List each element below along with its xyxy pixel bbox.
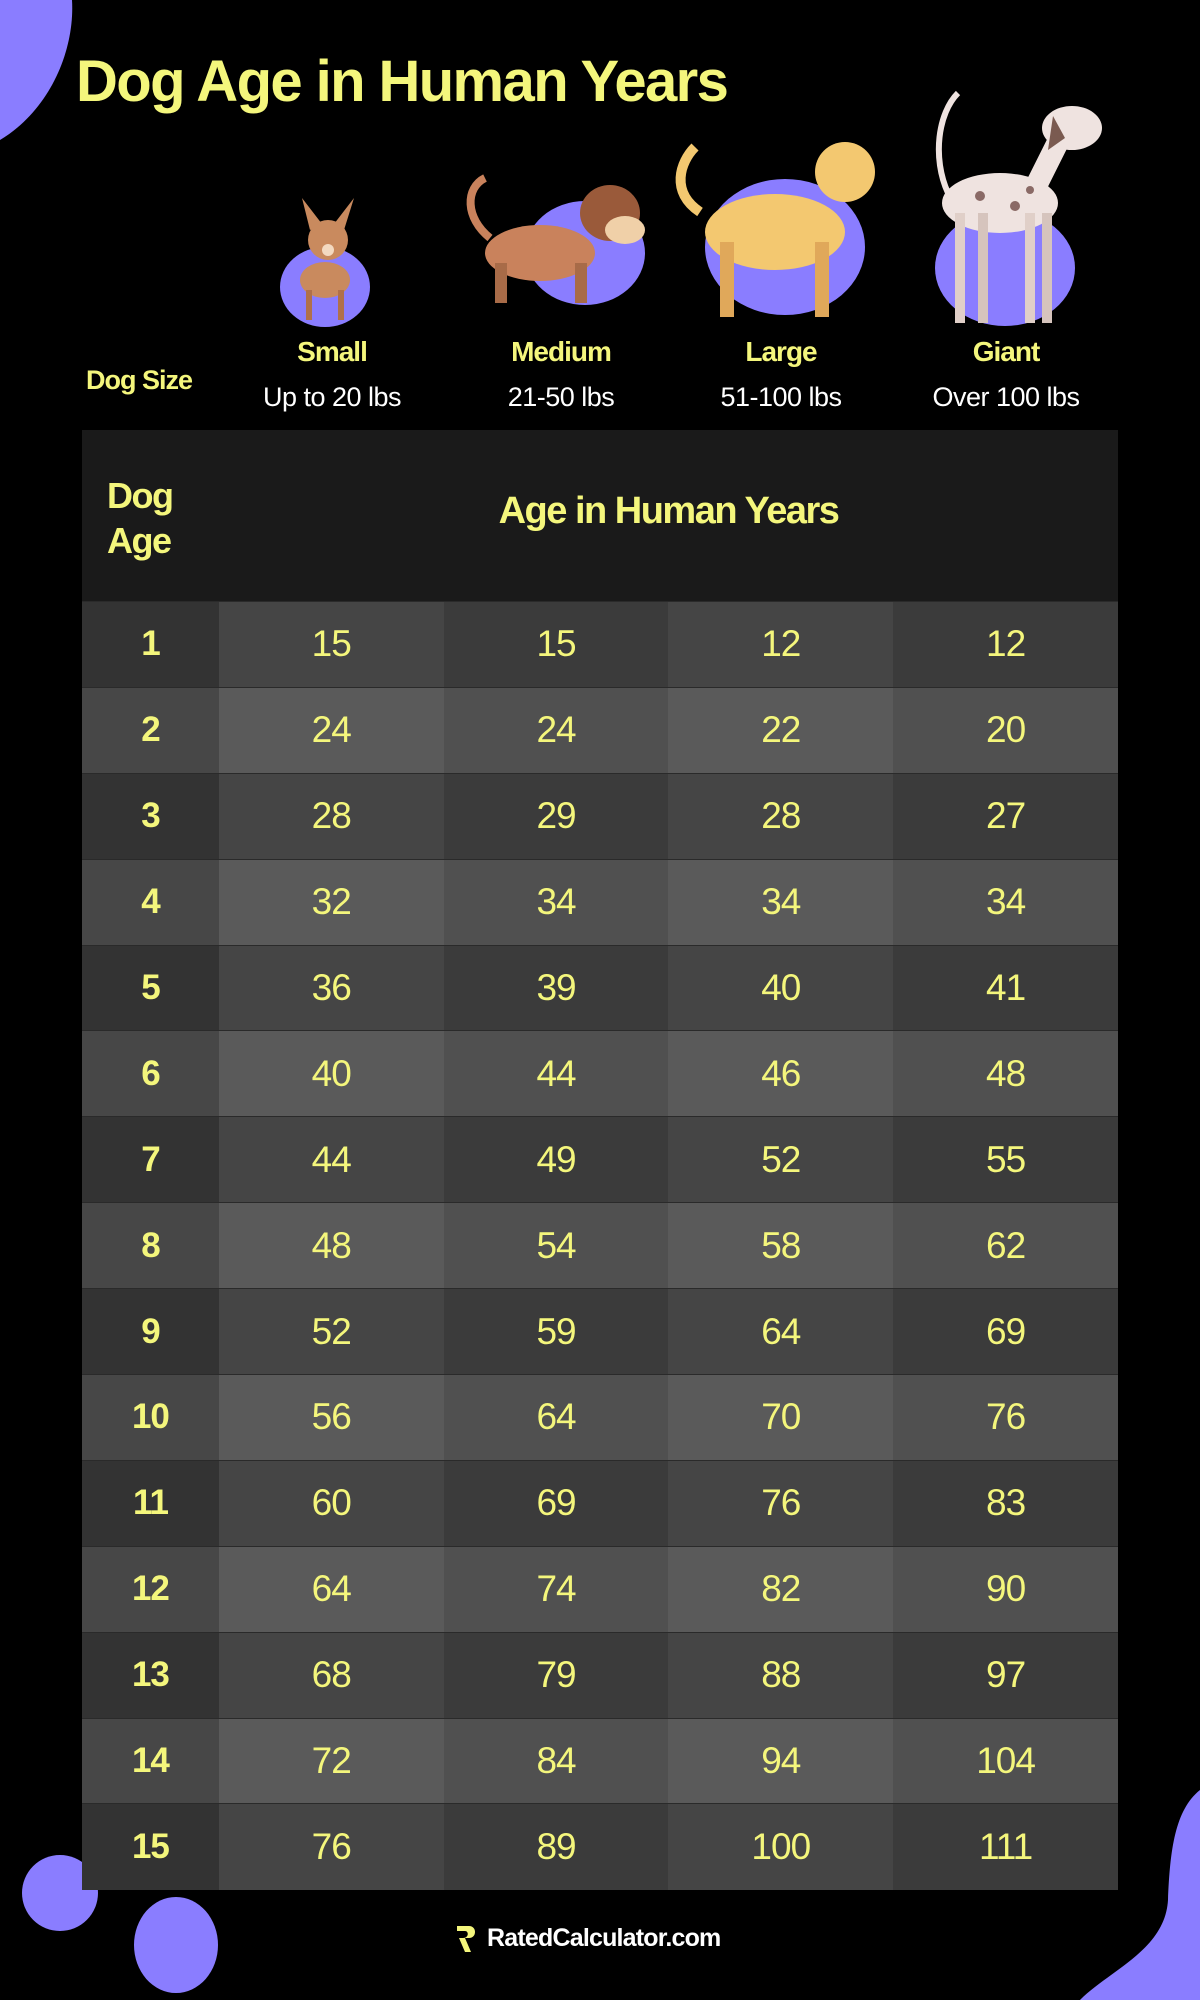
data table: 24 — [536, 709, 576, 750]
data table: 14 — [132, 1741, 169, 1780]
label: dog size: Dog Size — [86, 365, 192, 395]
data table: 97 — [986, 1654, 1025, 1695]
table header — [82, 430, 1118, 601]
data table: 20 — [986, 709, 1025, 750]
icon: giant dog — [935, 90, 1102, 326]
data table: 69 — [986, 1311, 1025, 1352]
data table: 27 — [986, 795, 1025, 836]
icon: small dog — [280, 198, 370, 327]
data table — [82, 601, 1118, 1890]
data table: 76 — [312, 1826, 351, 1867]
decorative blob: top-left — [0, 0, 72, 140]
data table: 36 — [312, 967, 351, 1008]
data table: 56 — [312, 1396, 351, 1437]
data table: 7 — [141, 1140, 160, 1179]
data table: 39 — [536, 967, 576, 1008]
data table: 41 — [986, 967, 1025, 1008]
data table: 13 — [132, 1655, 169, 1694]
data table: 10 — [132, 1397, 169, 1436]
data table: 79 — [536, 1654, 576, 1695]
data table: 4 — [141, 882, 160, 921]
data table: 34 — [761, 881, 800, 922]
label: giant: Over 100 lbs — [932, 382, 1080, 412]
title: Dog Age in Human Years — [76, 49, 727, 114]
data table: 60 — [312, 1482, 351, 1523]
data table: 68 — [312, 1654, 351, 1695]
data table: 111 — [979, 1826, 1032, 1867]
data table: 74 — [536, 1568, 576, 1609]
data table: 12 — [986, 623, 1025, 664]
data table: 29 — [536, 795, 576, 836]
data table: 32 — [312, 881, 351, 922]
data table: 76 — [761, 1482, 800, 1523]
data table: 24 — [312, 709, 351, 750]
data table: 28 — [312, 795, 351, 836]
data table: 62 — [986, 1225, 1025, 1266]
data table: 15 — [312, 623, 351, 664]
data table: 83 — [986, 1482, 1025, 1523]
data table: 44 — [536, 1053, 576, 1094]
footer: logo — [457, 1924, 720, 1952]
icon: large dog — [676, 142, 875, 317]
data table: 72 — [312, 1740, 351, 1781]
data table: 54 — [536, 1225, 576, 1266]
data table: 59 — [536, 1311, 576, 1352]
label: giant: Giant — [973, 336, 1039, 367]
data table: 22 — [761, 709, 800, 750]
icon: medium dog — [466, 174, 645, 305]
footer text: RatedCalculator.com — [487, 1924, 720, 1952]
data table: 15 — [536, 623, 576, 664]
label: small: Up to 20 lbs — [263, 382, 401, 412]
data table: 89 — [536, 1826, 576, 1867]
data table: 100 — [751, 1826, 810, 1867]
data table: 1 — [141, 624, 160, 663]
data table: 49 — [536, 1139, 576, 1180]
data table: 64 — [312, 1568, 351, 1609]
decorative blob: bottom-right — [1080, 1790, 1200, 2000]
data table: 48 — [312, 1225, 351, 1266]
label: large — [720, 336, 842, 412]
data table: 82 — [761, 1568, 800, 1609]
data table: 46 — [761, 1053, 800, 1094]
data table: 3 — [141, 796, 160, 835]
data table: 34 — [986, 881, 1025, 922]
data table: 28 — [761, 795, 800, 836]
label: medium: 21-50 lbs — [508, 382, 614, 412]
data table: 55 — [986, 1139, 1025, 1180]
data table: 48 — [986, 1053, 1025, 1094]
label: large: 51-100 lbs — [720, 382, 842, 412]
label: medium — [508, 336, 614, 412]
data table: 15 — [132, 1827, 169, 1866]
label: small: Small — [297, 336, 367, 367]
data table: 40 — [761, 967, 800, 1008]
label: large: Large — [745, 336, 817, 367]
header: dog age — [107, 475, 172, 561]
data table: 69 — [536, 1482, 576, 1523]
data table: 94 — [761, 1740, 800, 1781]
data table: 84 — [536, 1740, 576, 1781]
data table: 90 — [986, 1568, 1025, 1609]
label: giant — [932, 336, 1080, 412]
header: dog age: Age — [107, 520, 171, 561]
decorative blobs: bottom-left — [22, 1855, 218, 1993]
data table: 70 — [761, 1396, 800, 1437]
data table: 5 — [141, 968, 160, 1007]
data table: 2 — [141, 710, 160, 749]
data table: 9 — [141, 1312, 160, 1351]
data table: 88 — [761, 1654, 800, 1695]
data table: 8 — [141, 1226, 160, 1265]
header: dog age: Dog — [107, 475, 172, 516]
data table: 58 — [761, 1225, 800, 1266]
data table: 12 — [132, 1569, 169, 1608]
label: small — [263, 336, 401, 412]
data table: 6 — [141, 1054, 160, 1093]
data table: 76 — [986, 1396, 1025, 1437]
data table: 44 — [312, 1139, 351, 1180]
data table: 64 — [761, 1311, 800, 1352]
data table: 52 — [761, 1139, 800, 1180]
data table: 52 — [312, 1311, 351, 1352]
data table: 104 — [976, 1740, 1035, 1781]
label: medium: Medium — [511, 336, 611, 367]
data table: 64 — [536, 1396, 576, 1437]
header: age in human years: Age in Human Years — [499, 490, 838, 532]
data table: 40 — [312, 1053, 351, 1094]
data table: 12 — [761, 623, 800, 664]
icon: R logo — [457, 1926, 475, 1952]
data table: 34 — [536, 881, 576, 922]
data table: 11 — [133, 1483, 168, 1522]
